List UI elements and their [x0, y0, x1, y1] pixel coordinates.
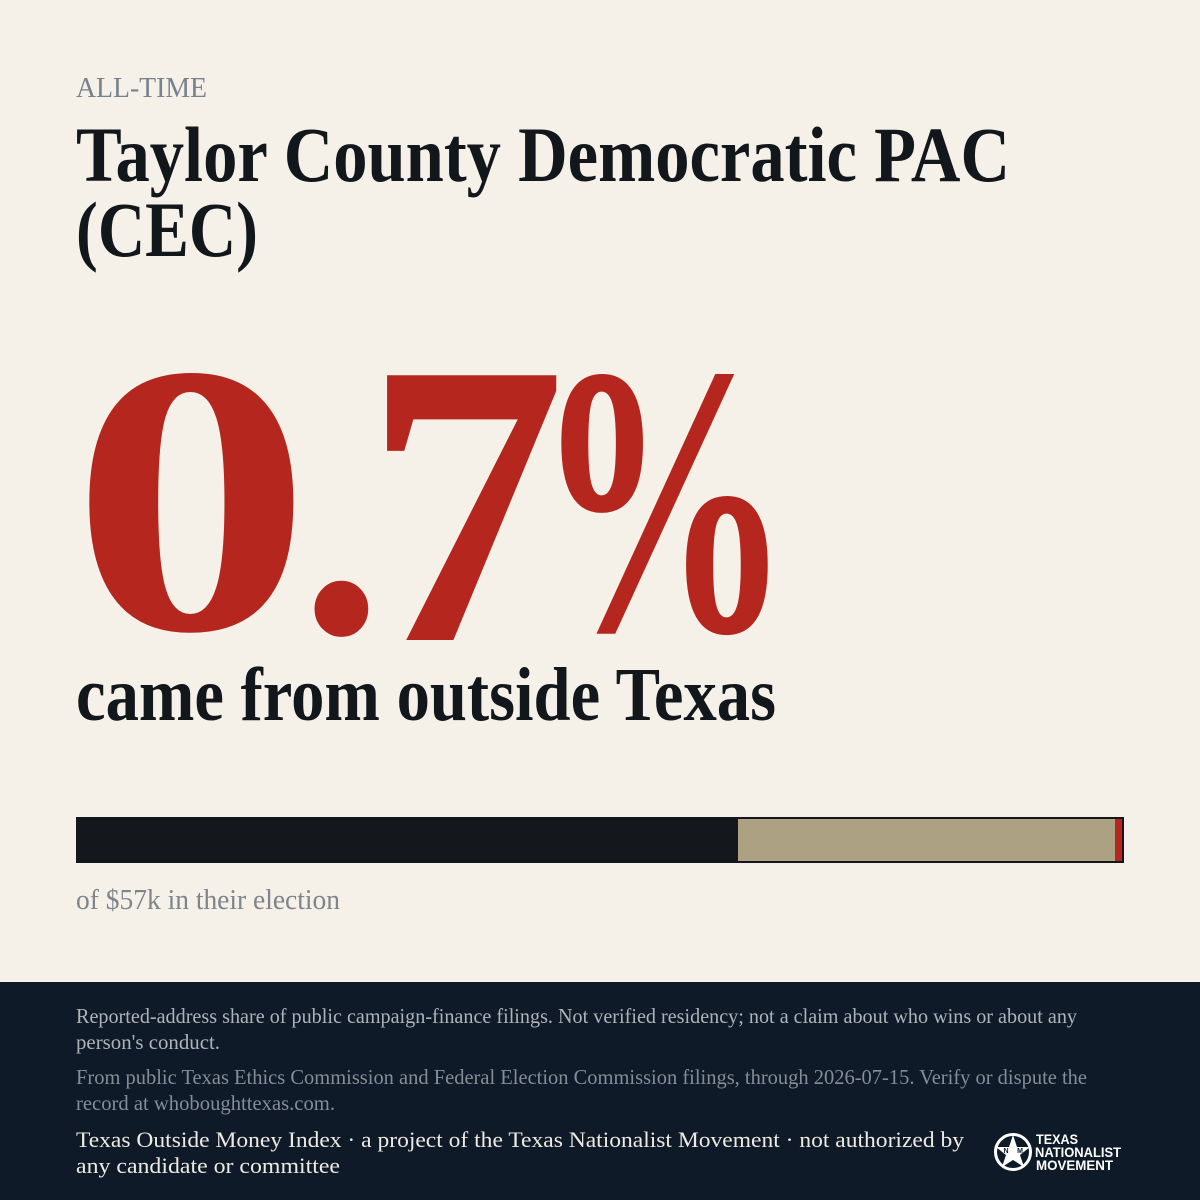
big percentage: [71, 281, 792, 728]
disclaimer: person's conduct.: [76, 1030, 220, 1054]
logo: Texas Nationalist Movement: NATIONALIST: [1035, 1145, 1122, 1160]
eyebrow label: ALL-TIME: [76, 73, 207, 104]
source note: record at whoboughttexas.com.: [76, 1091, 335, 1115]
source note: [76, 1065, 1087, 1115]
subheading: came from outside Texas: [76, 653, 776, 737]
attribution: [76, 1127, 964, 1178]
big percentage: 7: [364, 281, 566, 728]
logo: Texas Nationalist Movement: TEXAS: [1036, 1132, 1078, 1147]
footer panel: [0, 982, 1200, 1200]
disclaimer: Reported-address share of public campaign-finance filings. Not verified residency; not a claim about who wins or about any: [76, 1004, 1077, 1028]
attribution: Texas Outside Money Index · a project of the Texas Nationalist Movement · not authorized by: [76, 1127, 964, 1152]
logo: Texas Nationalist Movement: N: [1003, 1148, 1009, 1155]
title: [76, 111, 1010, 273]
bar caption: of $57k in their election: [76, 885, 340, 916]
title: Taylor County Democratic PAC: [76, 111, 1010, 198]
logo: Texas Nationalist Movement: M: [1017, 1148, 1023, 1155]
logo: Texas Nationalist Movement: MOVEMENT: [1036, 1158, 1114, 1173]
stacked bar: [76, 817, 1124, 863]
big percentage: 0: [71, 287, 312, 713]
big percentage: .: [300, 324, 383, 708]
attribution: any candidate or committee: [76, 1153, 340, 1178]
disclaimer: [76, 1004, 1077, 1054]
logo: Texas Nationalist Movement: [996, 1132, 1122, 1173]
source note: From public Texas Ethics Commission and Federal Election Commission filings, through 2026-07-15. Verify or dispute the: [76, 1065, 1087, 1089]
title: (CEC): [76, 186, 258, 273]
big percentage: %: [535, 286, 792, 714]
